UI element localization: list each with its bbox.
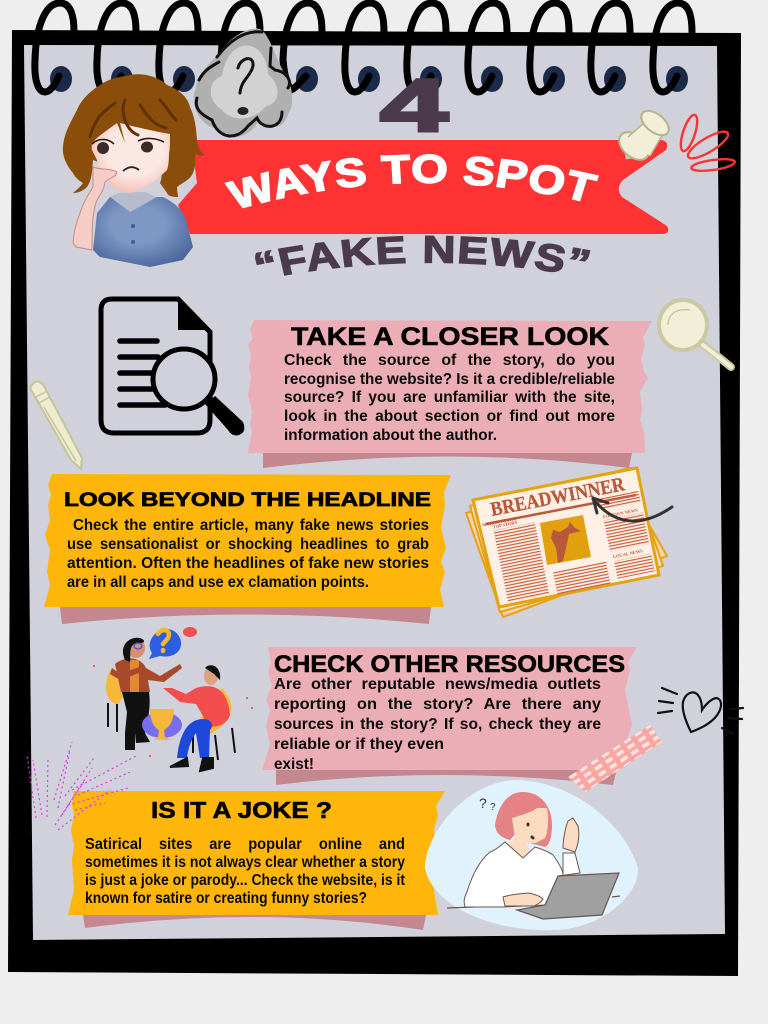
back sheets <box>466 474 667 617</box>
ribbon shadow <box>263 453 632 468</box>
woman glasses <box>134 643 142 649</box>
text columns <box>482 491 656 607</box>
body text: attention. Often the headlines of fake new stories <box>67 555 429 572</box>
panel: take a closer look <box>248 320 652 468</box>
body text: recognise the website? Is it a credible/reliable <box>284 371 615 388</box>
icon: magenta dotted spray <box>27 742 138 830</box>
arm and hand <box>73 167 117 250</box>
yellow torn paper <box>68 791 445 915</box>
ribbon shadow <box>60 607 431 624</box>
body text: look in the about section or find out more <box>284 408 615 425</box>
eyebrows and lids <box>92 138 164 144</box>
body text <box>67 517 429 591</box>
desk line <box>447 896 620 908</box>
icon: document with magnifier <box>101 299 244 435</box>
illustration: newspaper <box>466 468 667 617</box>
illustration: woman at laptop <box>425 780 638 930</box>
trophy base <box>142 712 182 738</box>
big number 4: 4 <box>380 64 448 147</box>
heading: TAKE A CLOSER LOOK <box>291 323 609 351</box>
icon: washi tape <box>568 725 662 792</box>
woman forearm <box>110 666 142 680</box>
ribbon shadow <box>276 768 617 785</box>
column head: foreign news: FOREIGN NEWS <box>602 507 639 519</box>
icon: red burst marks <box>677 113 735 173</box>
woman legs <box>122 692 150 750</box>
collar <box>110 192 157 212</box>
question dot <box>238 107 248 115</box>
eyes <box>97 142 109 154</box>
orange top <box>130 660 139 692</box>
body text: are in all caps and use ex clamation points. <box>67 574 369 591</box>
body text: Satirical sites are popular online and <box>85 836 405 853</box>
masthead rule <box>486 495 636 524</box>
arrow <box>593 498 672 521</box>
icon: pencil <box>30 381 82 469</box>
body text: information about the author. <box>284 427 497 444</box>
silhouette <box>551 522 581 563</box>
red bubble <box>183 627 197 637</box>
photo box <box>540 515 591 565</box>
column head: local news: LOCAL NEWS <box>613 548 644 559</box>
body text: Check the source of the story, do you <box>284 352 615 369</box>
body text <box>85 836 406 907</box>
pink torn paper <box>262 647 637 770</box>
lower hand <box>503 893 543 906</box>
date line: MARCH 14, 2025 <box>482 516 517 528</box>
man shoes <box>170 758 213 771</box>
notebook paper <box>24 45 725 940</box>
pink torn paper <box>248 320 652 453</box>
character: thinking girl <box>63 74 205 267</box>
body text: Are other reputable news/media outlets <box>274 676 601 693</box>
man legs <box>177 719 212 758</box>
body text <box>284 352 615 444</box>
icon: thought cloud <box>194 29 292 137</box>
illustration: two people talking <box>93 627 253 771</box>
raised hand <box>563 818 579 852</box>
mouth <box>123 167 139 171</box>
body text: reporting on the story? Are there any <box>274 696 601 713</box>
panel: check other resources <box>262 647 637 785</box>
body text: known for satire or creating funny stories? <box>85 890 367 907</box>
question mark <box>238 59 253 93</box>
masthead: BREADWINNER <box>489 473 627 521</box>
woman head <box>127 638 145 658</box>
panel: look beyond the headline <box>44 474 451 624</box>
fringe strands <box>90 100 176 137</box>
face <box>92 123 170 193</box>
speech bubble <box>149 629 181 659</box>
red dots <box>93 665 253 757</box>
body text: reliable or if they even <box>274 736 444 753</box>
yellow torn paper <box>44 474 451 607</box>
icon: heart with marks <box>658 688 743 734</box>
icon: deco magnifier <box>659 300 731 367</box>
front sheet <box>473 468 659 607</box>
hair <box>63 74 205 197</box>
heading: ways to spot: WAYS TO SPOT <box>224 154 599 208</box>
man torso <box>163 686 230 727</box>
body text: is just a joke or parody... Check the website, is it <box>85 872 406 889</box>
spiral holes <box>50 66 688 92</box>
body text: sources in the story? If so, check they are <box>274 716 601 733</box>
body text: exist! <box>274 756 314 773</box>
trophy <box>150 709 174 740</box>
hair <box>495 792 552 847</box>
blue shirt <box>93 197 193 267</box>
man head <box>204 667 218 685</box>
body text: source? If you are unfamiliar with the site, <box>284 389 615 406</box>
column head: top story: TOP STORY <box>492 519 519 530</box>
illustration: woman at laptop: ? <box>490 802 496 813</box>
heading: IS IT A JOKE ? <box>151 797 332 823</box>
woman torso <box>115 658 182 692</box>
heading: CHECK OTHER RESOURCES <box>274 651 625 678</box>
man chair legs <box>193 728 235 760</box>
body text: Check the entire article, many fake news stories <box>73 517 429 534</box>
face and neck <box>506 808 548 858</box>
panel: is it a joke <box>68 791 445 930</box>
icon: pushpin <box>614 106 673 165</box>
eye and mouth <box>528 824 533 838</box>
question mark <box>158 630 169 651</box>
red ribbon banner <box>178 140 668 234</box>
laptop <box>517 873 619 919</box>
man chair <box>196 688 231 735</box>
woman chair legs <box>108 703 117 732</box>
body text: sometimes it is not always clear whether a story <box>85 854 405 871</box>
woman chair <box>106 667 127 705</box>
spiral rings <box>35 3 692 92</box>
shirt <box>464 842 580 907</box>
body text: use sensationalist or shocking headlines to grab <box>67 536 429 553</box>
ribbon shadow <box>83 915 426 930</box>
question marks: ? <box>479 795 487 811</box>
heading: LOOK BEYOND THE HEADLINE <box>64 490 431 511</box>
body text <box>274 676 601 773</box>
pale blue blob <box>425 780 638 930</box>
heading: fake news: “FAKE NEWS” <box>255 236 590 276</box>
shirt buttons <box>131 224 135 244</box>
